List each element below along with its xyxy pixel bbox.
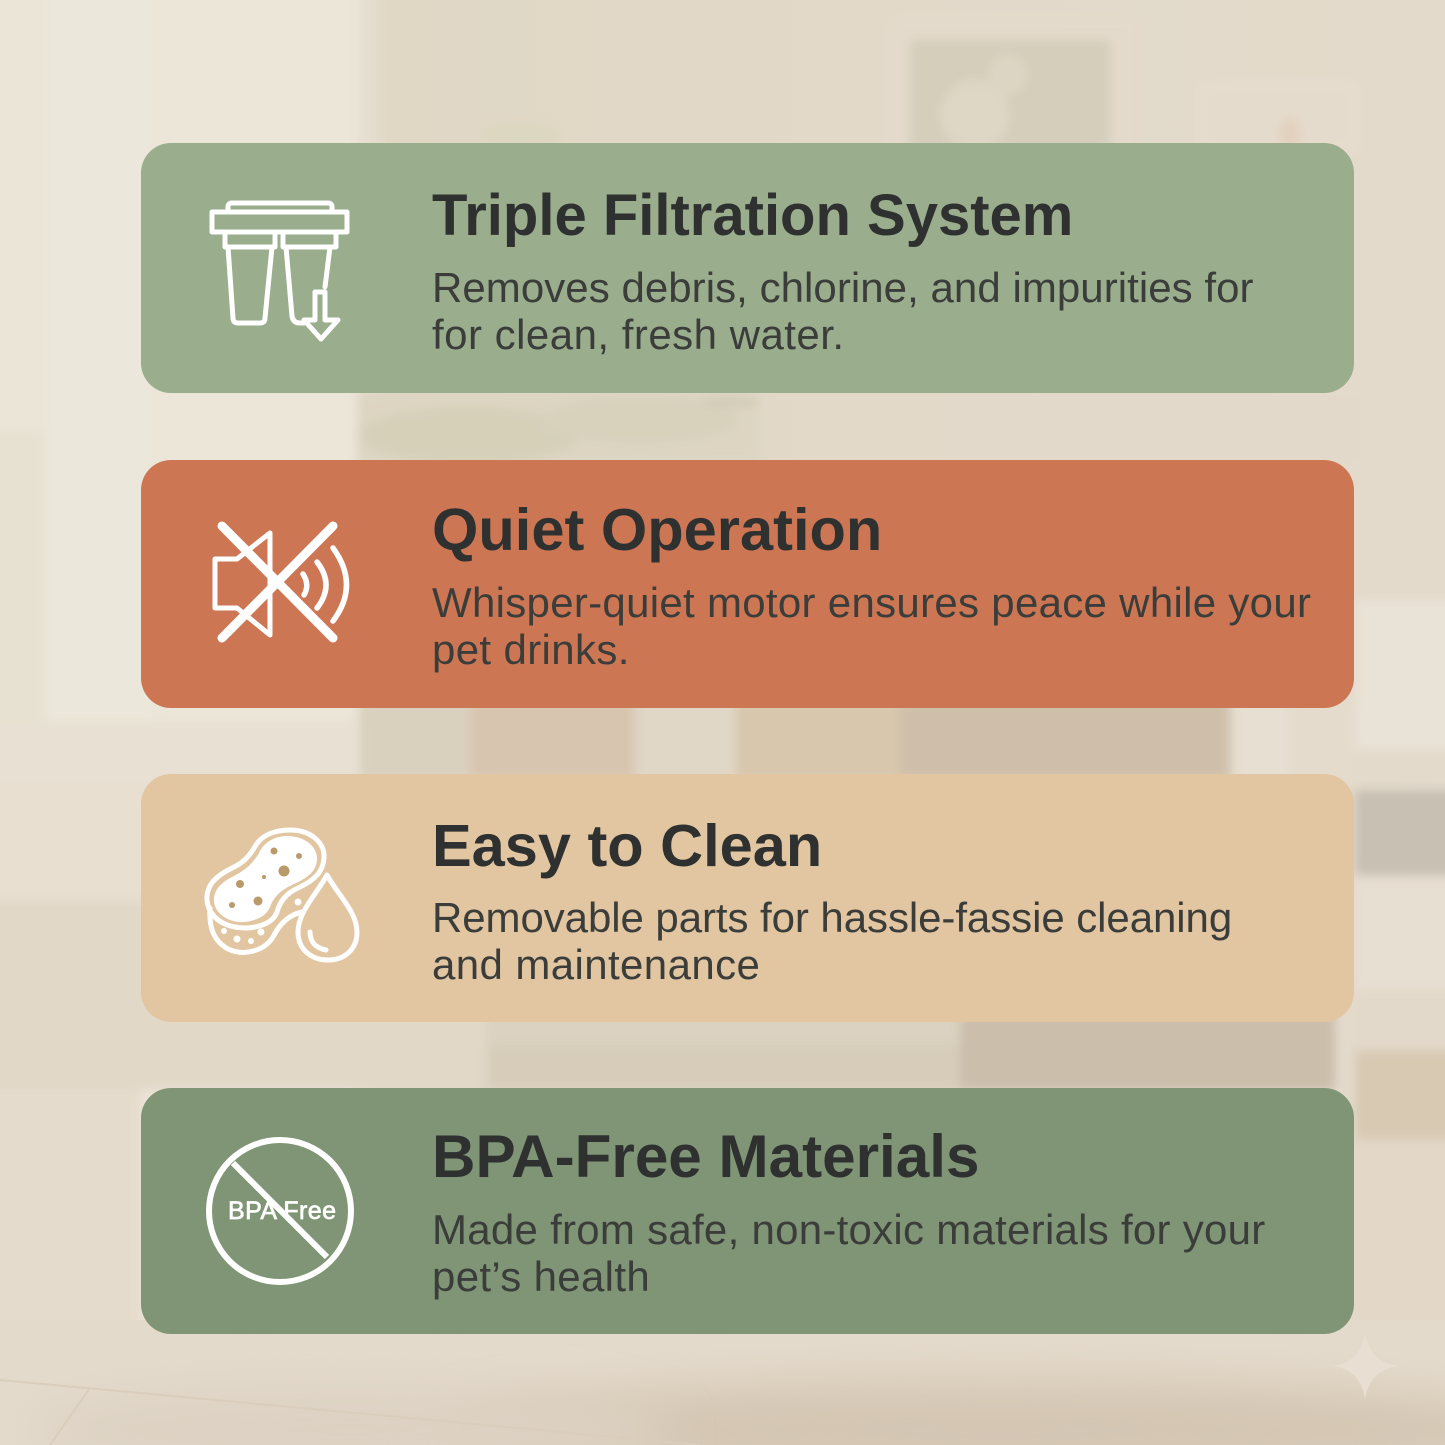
plant between card one and two	[358, 393, 760, 463]
panel: triple filtration system	[141, 143, 1354, 393]
heading: Triple Filtration System	[432, 183, 1073, 248]
description	[432, 894, 1232, 988]
floor	[0, 1320, 1445, 1445]
description: for clean, fresh water.	[432, 311, 845, 358]
icon: sponge and water drop	[204, 828, 360, 962]
description	[432, 579, 1311, 673]
frames	[892, 22, 1134, 152]
icon: water filter cartridges	[210, 200, 350, 342]
description	[432, 264, 1254, 358]
heading: Quiet Operation	[432, 496, 882, 563]
panel: BPA-free materials	[141, 1088, 1354, 1334]
description: Removes debris, chlorine, and impurities for	[432, 264, 1254, 311]
icon: BPA free prohibition sign	[206, 1137, 354, 1285]
icon: muted speaker	[212, 522, 350, 642]
description: Whisper-quiet motor ensures peace while your	[432, 579, 1311, 626]
description: and maintenance	[432, 941, 760, 988]
decorative sparkle	[1332, 1332, 1400, 1400]
icon: BPA free prohibition sign: BPA Free	[228, 1197, 336, 1225]
description: Removable parts for hassle-fassie cleaning	[432, 894, 1232, 941]
description: Made from safe, non-toxic materials for your	[432, 1206, 1266, 1253]
description: pet’s health	[432, 1253, 650, 1300]
panel: easy to clean	[141, 774, 1354, 1022]
panel: quiet operation	[141, 460, 1354, 708]
small plant above first card	[480, 123, 560, 147]
pot and cat	[360, 700, 470, 780]
description	[432, 1206, 1266, 1300]
heading: Easy to Clean	[432, 812, 822, 879]
description: pet drinks.	[432, 626, 630, 673]
fountain and cat body	[486, 1015, 960, 1090]
window and curtains	[0, 0, 355, 720]
heading: BPA-Free Materials	[432, 1123, 979, 1190]
right side furniture	[1355, 600, 1445, 750]
